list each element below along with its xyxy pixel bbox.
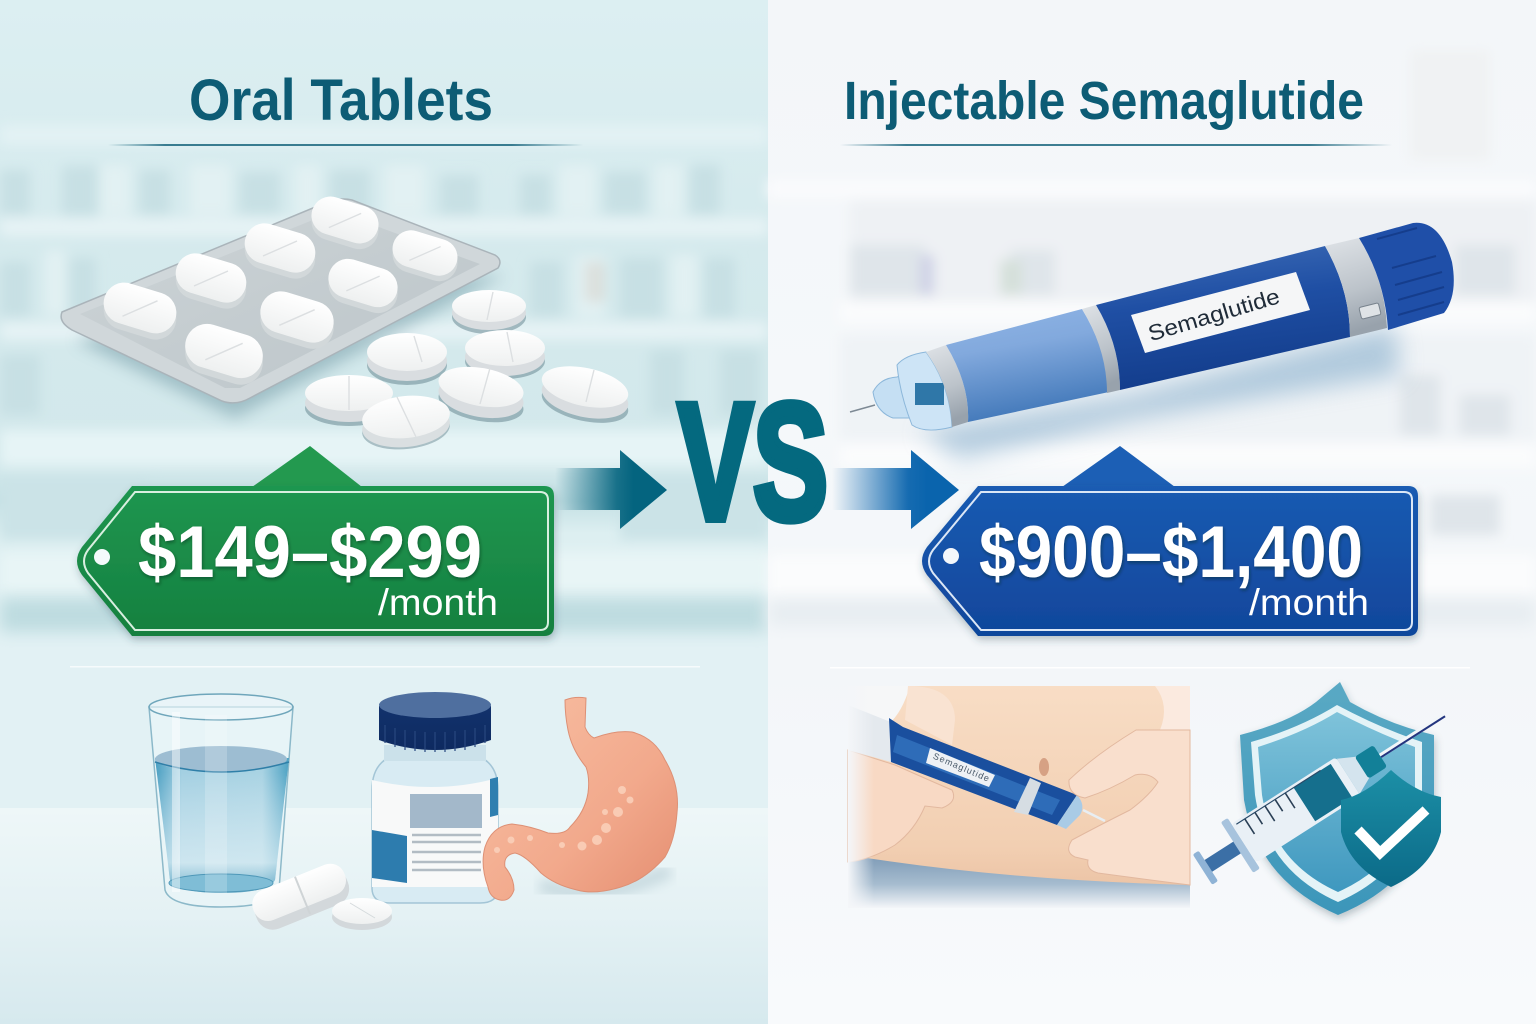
price tag: oral tablets [77, 446, 554, 636]
icon: stomach [483, 697, 678, 900]
icon: injection into abdomen: Semaglutide [932, 751, 991, 784]
icon: glass of water [149, 694, 293, 907]
price tag: injectable semaglutide [922, 446, 1418, 636]
panel: oral tablets background [0, 0, 768, 1024]
price tag: injectable semaglutide: $900–$1,400 [979, 512, 1363, 593]
price tag: oral tablets: /month [378, 582, 498, 623]
panel: injectable background [768, 0, 1536, 1024]
icon: loose tablets [305, 290, 632, 453]
arrow: left to VS [555, 450, 667, 529]
price tag: oral tablets: $149–$299 [138, 512, 482, 593]
label: VS: VS [678, 370, 828, 555]
divider: right heading rule [840, 144, 1392, 146]
icon: injector pen: Semaglutide [1145, 284, 1283, 346]
icon: tablets beside glass [248, 859, 392, 935]
icon: injector pen [850, 223, 1454, 460]
divider: left heading rule [108, 144, 583, 146]
icon: blister pack with tablets [61, 192, 505, 418]
heading: Oral Tablets: Oral Tablets [189, 68, 493, 133]
icon: shield with syringe and check [1186, 682, 1460, 915]
icon: bottle [372, 692, 498, 903]
arrow: VS to right [832, 450, 959, 529]
icon: injection into abdomen [848, 686, 1190, 908]
price tag: injectable semaglutide: /month [1249, 582, 1369, 623]
heading: Injectable Semaglutide: Injectable Semaglutide [844, 71, 1364, 131]
